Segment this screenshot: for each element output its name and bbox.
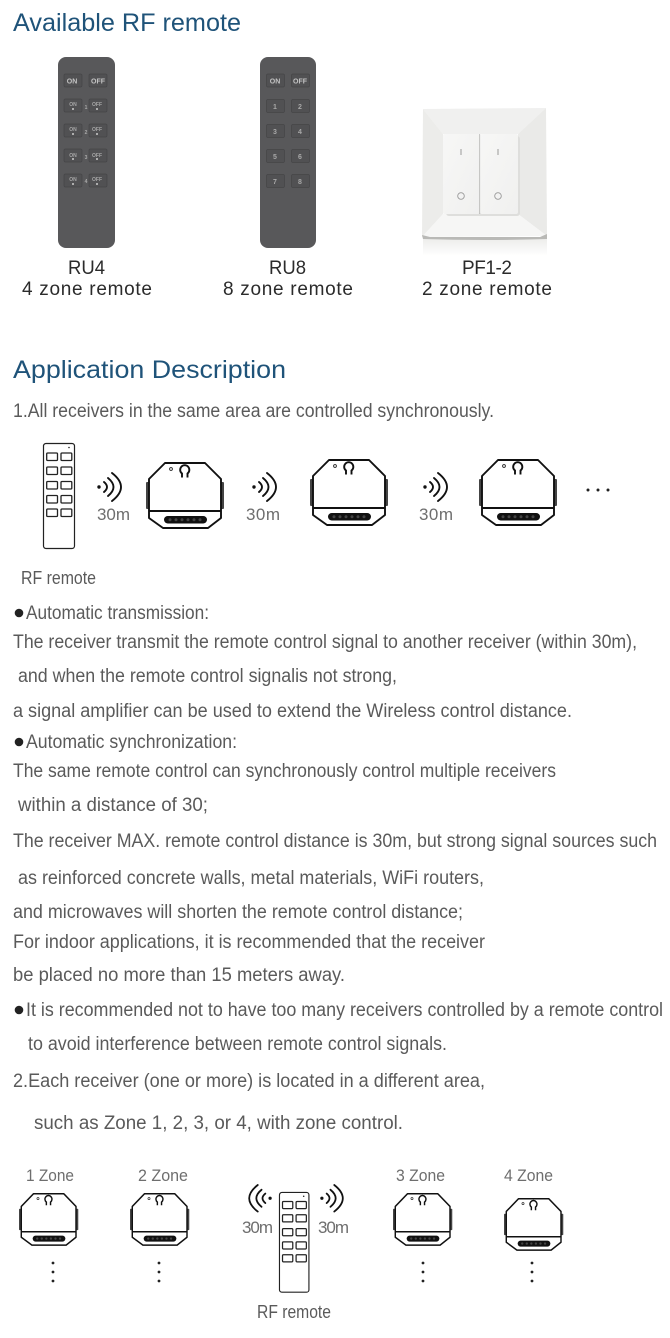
zone 1	[19, 1166, 78, 1282]
RU8 remote body: 8	[298, 179, 302, 186]
RU4 remote body: OFF	[91, 78, 106, 86]
RU4 labels: 4 zone remote	[22, 279, 152, 300]
PF1-2 labels	[422, 258, 552, 300]
text line: and microwaves will shorten the remote control distance;	[13, 902, 463, 923]
text line: to avoid interference between remote control signals.	[28, 1034, 447, 1055]
zone 4	[504, 1166, 563, 1282]
RU4 remote body: ON	[69, 127, 77, 133]
icon: receiver 2	[310, 460, 388, 525]
zone 4: 4 Zone	[504, 1166, 553, 1185]
text line: within a distance of 30;	[17, 795, 208, 816]
RU8 labels: RU8	[269, 258, 306, 279]
heading: Available RF remote: Available RF remote	[13, 9, 241, 37]
text line: 2.Each receiver (one or more) is located in a different area,	[13, 1071, 485, 1092]
RU4 labels: RU4	[68, 258, 105, 279]
heading: Application Description: Application Description	[13, 356, 286, 384]
text line: For indoor applications, it is recommended that the receiver	[13, 932, 486, 953]
RU8 remote body: OFF	[293, 78, 308, 86]
RU8 remote body: 4	[298, 129, 302, 136]
label: RF remote: RF remote	[21, 568, 96, 588]
RU4 remote body	[58, 57, 115, 248]
text line: The same remote control can synchronously control multiple receivers	[13, 761, 556, 782]
RU4 remote body: OFF	[92, 177, 102, 183]
RF remote with signals both ways: RF remote	[257, 1302, 331, 1322]
text block: transmission and synchronization notes	[13, 603, 663, 1134]
zone 2	[130, 1166, 189, 1282]
icon: signal waves 3	[423, 473, 447, 501]
label: 30m: 30m	[419, 505, 453, 524]
RF remote with signals both ways: 30m	[242, 1218, 273, 1237]
RF remote with signals both ways	[242, 1185, 349, 1322]
RU4 remote body: OFF	[92, 153, 102, 159]
icon: signal waves 2	[252, 473, 276, 501]
RU8 remote body: 7	[273, 179, 277, 186]
RU4 remote body: 3	[85, 155, 88, 161]
zone 3	[393, 1166, 452, 1282]
product: RU8 remote	[223, 57, 353, 300]
label: 30m: 30m	[246, 505, 280, 524]
diagram: synchronous chain of receivers	[44, 444, 610, 548]
RU4 remote body: 2	[85, 130, 88, 136]
text line: The receiver transmit the remote control signal to another receiver (within 30m),	[13, 632, 637, 653]
icon: signal waves 1	[97, 473, 121, 501]
label: 30m: 30m	[97, 505, 130, 524]
text line: and when the remote control signalis not strong,	[18, 666, 397, 687]
RU8 remote body: ON	[270, 78, 280, 86]
RU4 remote body: 4	[85, 179, 88, 185]
zone 3: 3 Zone	[396, 1166, 445, 1185]
RU8 remote body: 1	[273, 104, 277, 111]
icon: continuation dots	[586, 488, 610, 492]
text: synchronous control intro: 1.All receivers in the same area are controlled synchronously.	[13, 401, 494, 422]
bullet heading: Automatic transmission: Automatic transmission:	[26, 603, 209, 624]
RU8 remote body: 2	[298, 104, 302, 111]
RU4 remote body: ON	[69, 153, 77, 159]
RU4 labels	[22, 258, 152, 300]
RU8 remote body: 3	[273, 129, 277, 136]
product: RU4 remote	[22, 57, 152, 300]
text line: such as Zone 1, 2, 3, or 4, with zone control.	[34, 1113, 403, 1134]
bullet heading: Automatic synchronization: Automatic synchronization:	[26, 732, 237, 753]
text line: as reinforced concrete walls, metal materials, WiFi routers,	[18, 868, 484, 889]
RU4 remote body: 1	[85, 105, 88, 111]
PF1-2 labels: PF1-2	[462, 258, 512, 279]
RU8 labels	[223, 258, 353, 300]
RU4 remote body: OFF	[92, 102, 102, 108]
icon: RF remote	[44, 444, 74, 548]
RU4 remote body: ON	[67, 78, 77, 86]
RU8 remote body	[260, 57, 316, 248]
RU8 remote body: 5	[273, 154, 277, 161]
RU8 labels: 8 zone remote	[223, 279, 353, 300]
RU8 remote body: 6	[298, 154, 302, 161]
RU4 remote body: ON	[69, 177, 77, 183]
zone 2: 2 Zone	[138, 1166, 188, 1185]
text line: be placed no more than 15 meters away.	[13, 965, 345, 986]
product: PF1-2 wall switch	[422, 108, 552, 300]
icon: receiver 3	[479, 460, 557, 525]
icon: receiver 1	[146, 463, 224, 528]
text line: a signal amplifier can be used to extend the Wireless control distance.	[13, 701, 572, 722]
RF remote with signals both ways: 30m	[318, 1218, 349, 1237]
zone 1: 1 Zone	[26, 1166, 74, 1185]
diagram: zone control	[19, 1166, 563, 1322]
RU4 remote body: ON	[69, 102, 77, 108]
wall plate with two rocker keys	[422, 108, 547, 256]
PF1-2 labels: 2 zone remote	[422, 279, 552, 300]
RU4 remote body: OFF	[92, 127, 102, 133]
